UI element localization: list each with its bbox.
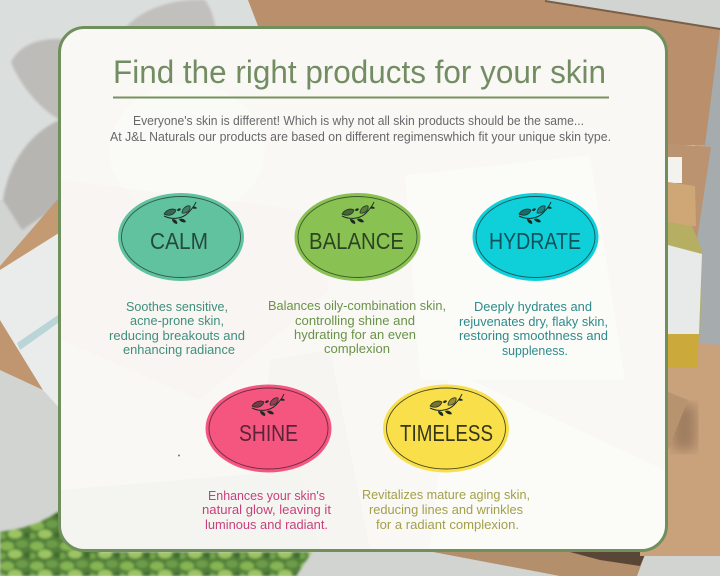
description: SHINE: Enhances your skin's xyxy=(208,488,325,503)
plant foliage xyxy=(0,512,312,576)
kraft box lower right xyxy=(640,338,720,556)
icon: sprig xyxy=(430,394,463,416)
badge: HYDRATE: HYDRATE xyxy=(489,228,581,254)
icon: sprig xyxy=(164,202,197,224)
title underline xyxy=(113,96,609,98)
towel xyxy=(3,0,218,230)
panel: frosted card xyxy=(60,28,666,550)
box corner bottom xyxy=(433,552,646,576)
intro text: At J&L Naturals our products are based on different regimenswhich fit your unique skin type. xyxy=(110,129,611,144)
description: SHINE xyxy=(202,488,331,532)
description: TIMELESS: for a radiant complexion. xyxy=(376,517,519,532)
faint products showing through xyxy=(61,526,665,549)
serum bottle xyxy=(668,157,702,368)
description: BALANCE xyxy=(268,298,446,356)
intro text: Everyone's skin is different! Which is why not all skin products should be the same... xyxy=(133,113,584,128)
description: TIMELESS: reducing lines and wrinkles xyxy=(369,502,523,517)
description: BALANCE: controlling shine and xyxy=(295,313,415,328)
badge: TIMELESS: TIMELESS xyxy=(400,420,493,446)
description: CALM xyxy=(109,299,245,357)
badge: BALANCE xyxy=(294,193,420,281)
description: CALM: Soothes sensitive, xyxy=(126,299,228,314)
badge: SHINE: SHINE xyxy=(239,420,298,446)
badge: CALM xyxy=(118,193,244,281)
description: HYDRATE: rejuvenates dry, flaky skin, xyxy=(459,314,608,329)
badge: SHINE xyxy=(206,384,332,472)
badge: TIMELESS xyxy=(383,384,509,472)
label jar xyxy=(0,226,70,420)
intro text xyxy=(110,113,611,144)
description: BALANCE: hydrating for an even xyxy=(294,327,416,342)
badge: BALANCE: BALANCE xyxy=(309,228,404,254)
description: CALM: enhancing radiance xyxy=(123,342,235,357)
stray dot xyxy=(178,454,180,456)
description: BALANCE: Balances oily-combination skin, xyxy=(268,298,446,313)
description: TIMELESS xyxy=(362,487,530,532)
kraft box lid xyxy=(248,0,720,145)
description: TIMELESS: Revitalizes mature aging skin, xyxy=(362,487,530,502)
description: HYDRATE xyxy=(459,299,608,358)
description: SHINE: luminous and radiant. xyxy=(205,517,328,532)
description: CALM: acne-prone skin, xyxy=(130,313,224,328)
grey wall right xyxy=(680,30,720,345)
title: Find the right products for your skin xyxy=(113,54,606,90)
kraft left xyxy=(0,185,70,272)
description: BALANCE: complexion xyxy=(324,341,390,356)
description: SHINE: natural glow, leaving it xyxy=(202,502,331,517)
badge: CALM: CALM xyxy=(150,228,208,254)
description: HYDRATE: restoring smoothness and xyxy=(459,328,608,343)
description: HYDRATE: suppleness. xyxy=(502,343,568,358)
icon: sprig xyxy=(252,394,285,416)
description: CALM: reducing breakouts and xyxy=(109,328,245,343)
badge: HYDRATE xyxy=(472,193,598,281)
description: HYDRATE: Deeply hydrates and xyxy=(474,299,592,314)
icon: sprig xyxy=(342,202,375,224)
icon: sprig xyxy=(519,202,552,224)
